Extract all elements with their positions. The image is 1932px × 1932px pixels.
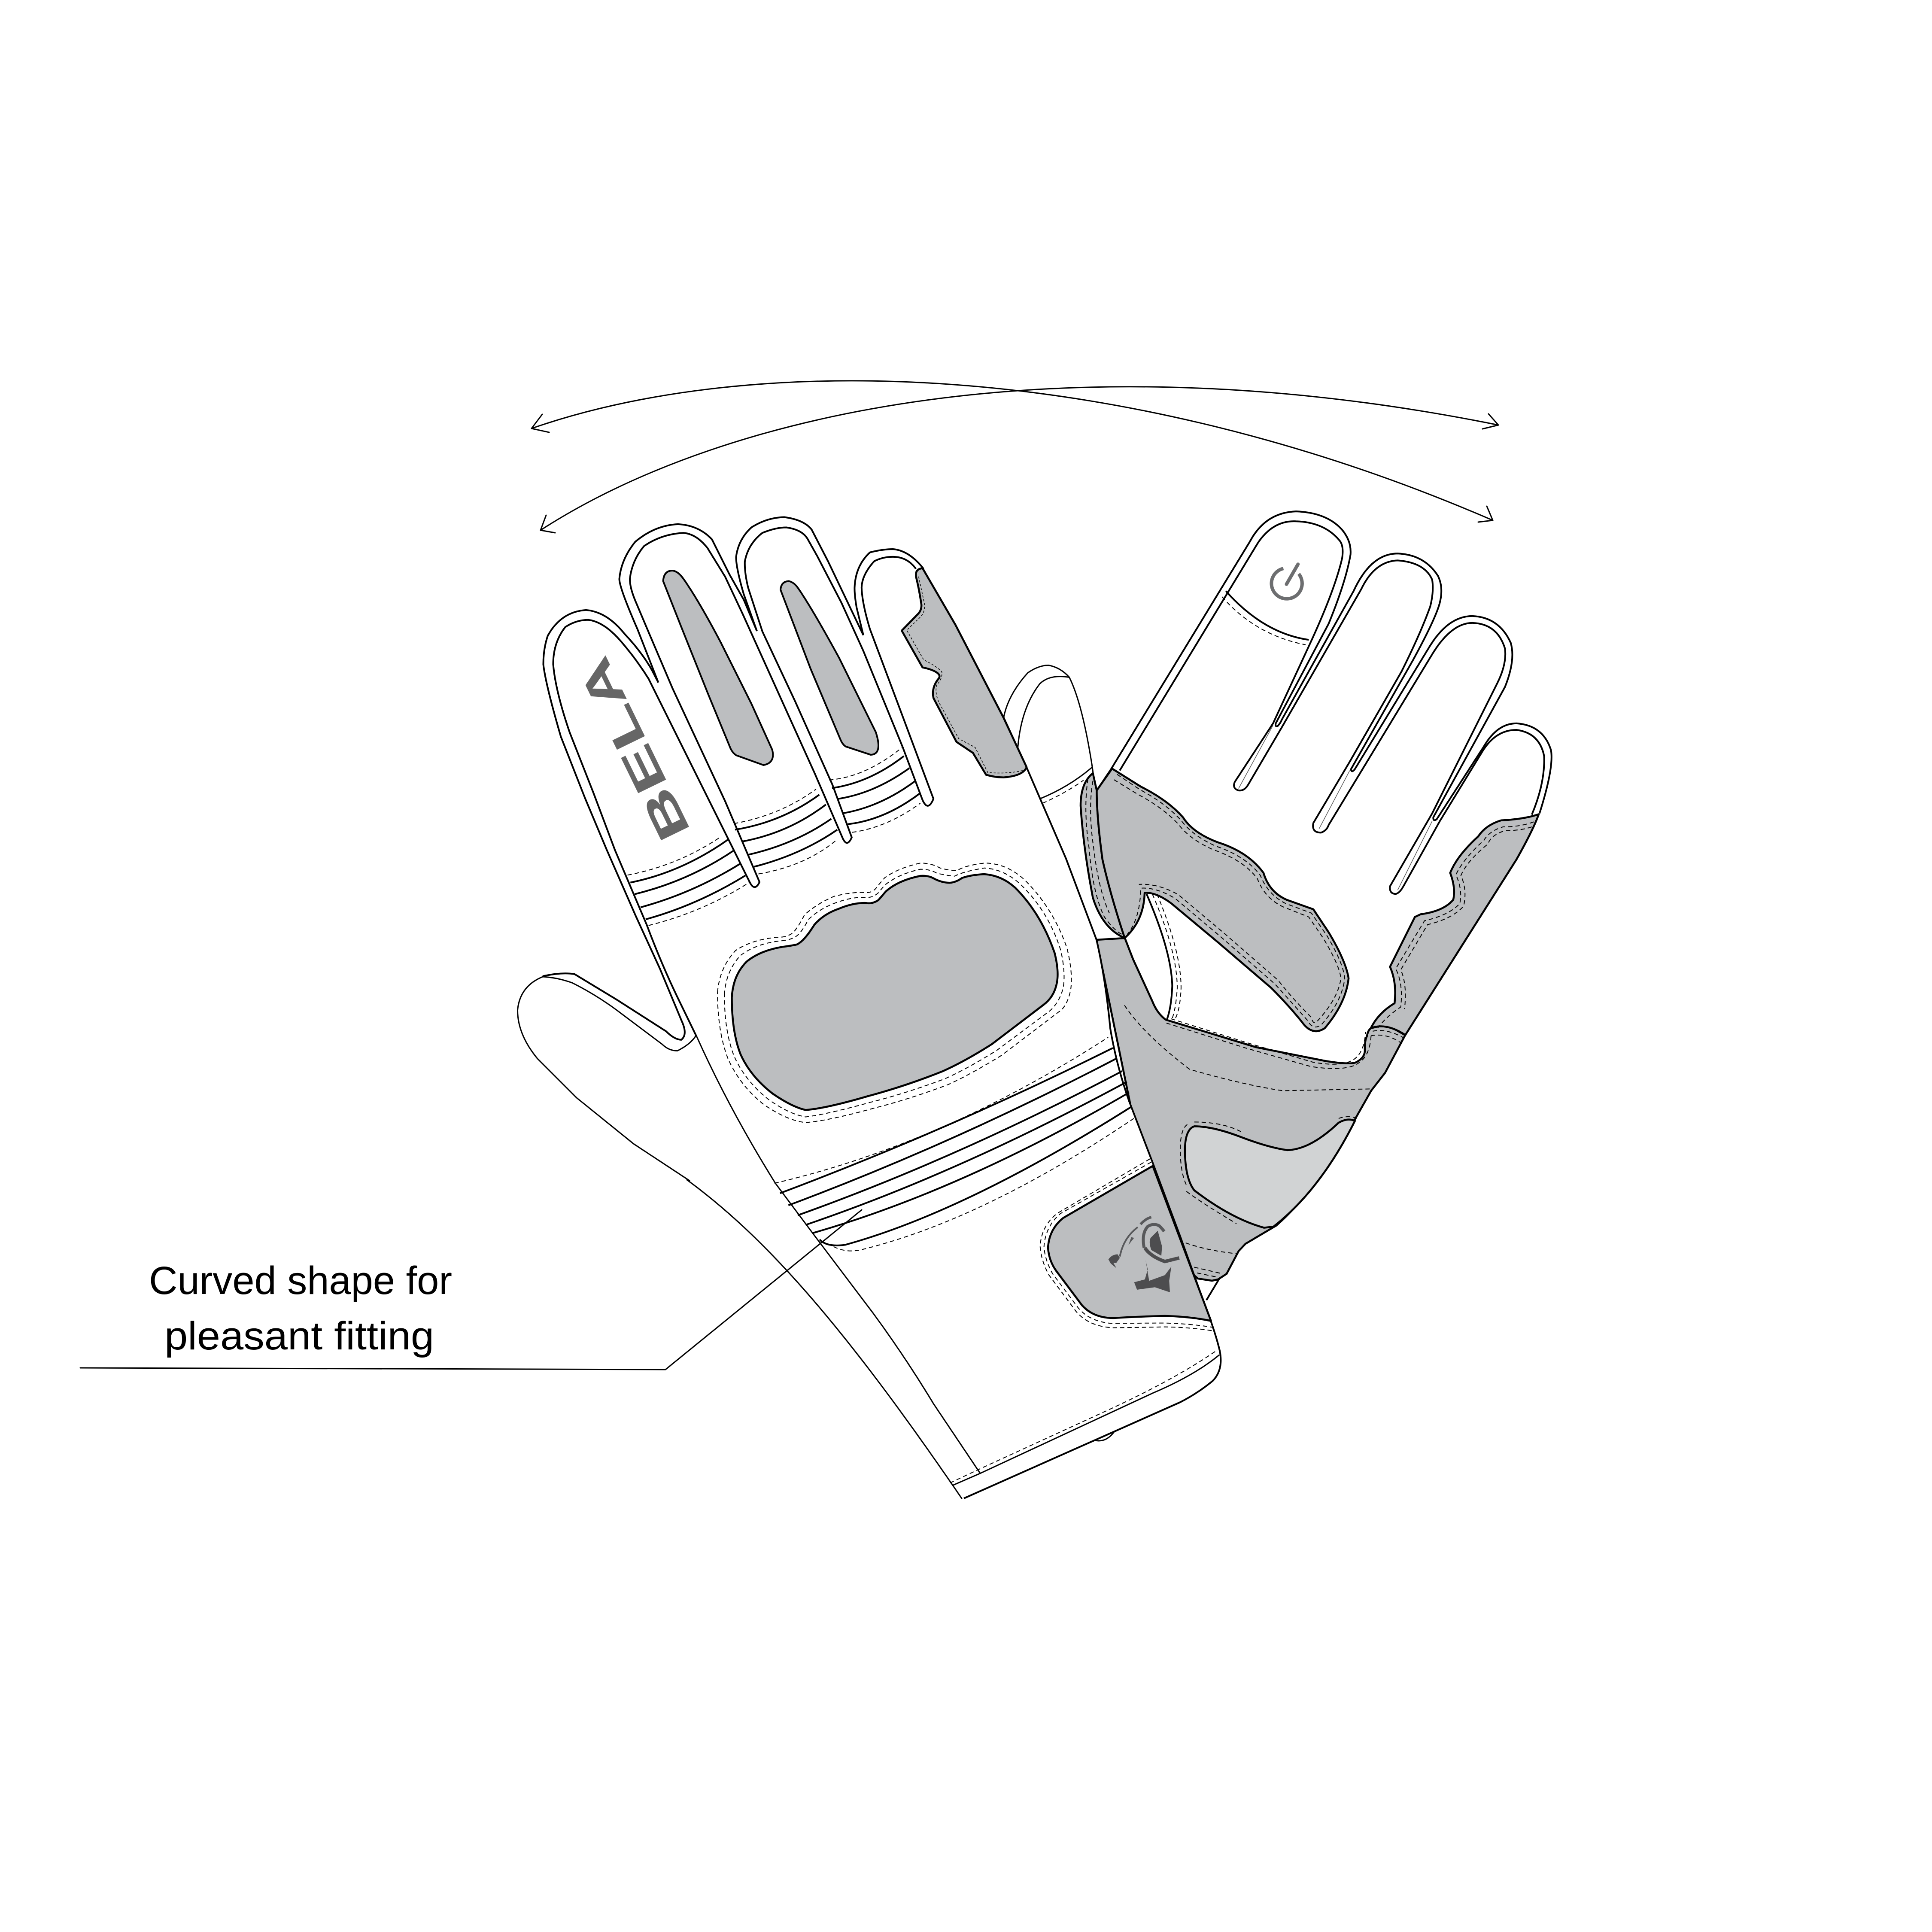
arrow: swing arc to upper left and lower right [532,381,1493,522]
callout label: pleasant fitting [164,1314,434,1358]
arrow: swing arc to lower left and upper right [541,387,1498,533]
ring and middle base stripes [734,748,920,874]
callout label [149,1259,452,1358]
thumb lower edge [687,1180,962,1498]
left glove outer edge [923,568,1221,1498]
wrist light patch [1124,1005,1371,1228]
pinky base stripes and thumb [518,837,750,1181]
right glove thumb [1004,665,1096,803]
palm edge, wrist stripes and cuff [696,1036,1219,1485]
finger outer contour [1097,511,1552,820]
ring finger outer line [620,524,757,683]
index finger grey panel [902,568,1027,778]
logo wordmark: BELA [568,649,700,849]
wrist grey patch with bear logo [1040,1159,1214,1331]
cuff hem [953,1355,1219,1485]
outer grey panel [1371,814,1539,1035]
inner palm edge [696,1036,980,1473]
finger grey inserts [663,571,878,765]
right glove: palm side, behind [1004,511,1552,1300]
icon: bear logo [1109,1217,1179,1292]
index finger outer line [854,549,923,635]
leader line [80,1210,862,1370]
right glove wrist panel [1097,938,1405,1300]
continuous inner contour of the four fingers [553,527,933,1036]
finger inner contour [1120,521,1544,894]
icon: power symbol [1271,564,1302,599]
thumb lower contour [518,977,696,1181]
palm grey panel [1097,769,1349,1031]
wrist lower seams [1186,1191,1236,1300]
finger outlines [543,517,933,1040]
inner strap seam [1147,894,1172,1020]
left glove white body mask [515,515,1221,1498]
left glove: back of hand, in front [515,515,1221,1498]
wrist stripes [775,1037,1134,1251]
knuckle protector [717,863,1071,1123]
fingertip touch seam [1226,591,1309,640]
middle finger outer line [736,517,863,635]
callout label: Curved shape for [149,1259,452,1303]
thumb-side grey strip [1081,773,1125,938]
pinky finger and thumb top line [543,610,685,1040]
right glove fingers and palm panels [1081,511,1552,1043]
